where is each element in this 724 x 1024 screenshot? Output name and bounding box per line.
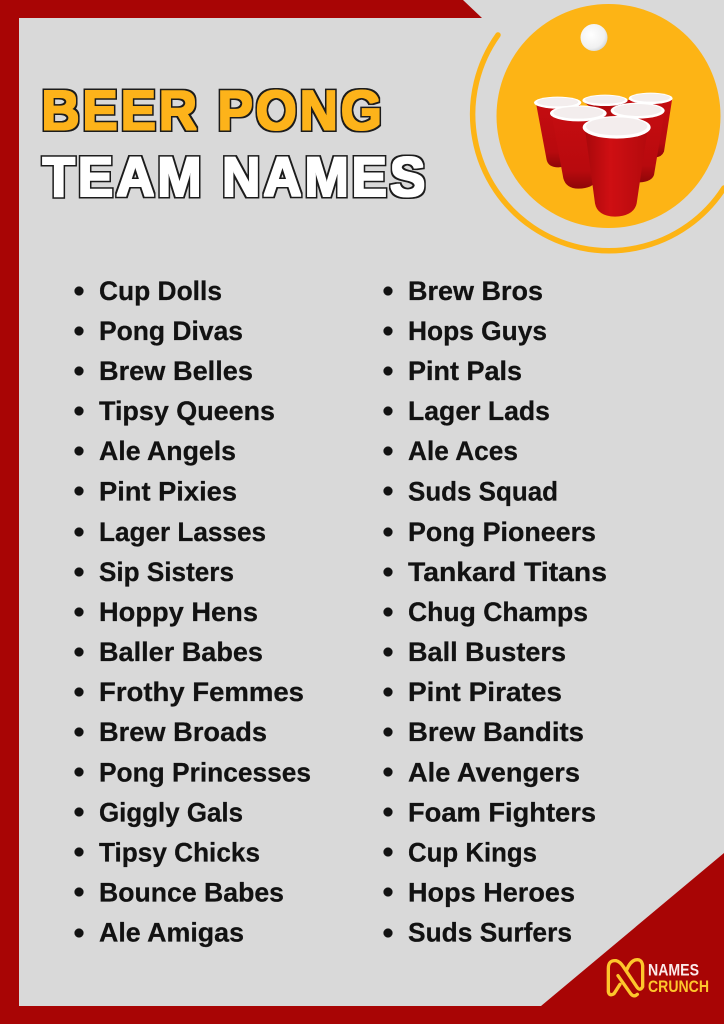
logo: Names Crunch xyxy=(608,960,709,996)
list item: Frothy Femmes: Frothy Femmes xyxy=(99,677,304,707)
list item: Sip Sisters: Sip Sisters xyxy=(99,557,234,587)
list item: Pint Pals: Pint Pals xyxy=(408,356,522,386)
list item: Pong Princesses: Pong Princesses xyxy=(99,758,311,788)
list item: Hoppy Hens: Hoppy Hens xyxy=(99,597,258,627)
list item: Ale Avengers: Ale Avengers xyxy=(408,758,580,788)
list item: Ale Amigas: Ale Amigas xyxy=(99,918,244,948)
title line: Beer Pong: BEER PONG xyxy=(42,79,382,142)
wordmark: Names: NAMES xyxy=(648,962,699,980)
list item: Brew Broads: Brew Broads xyxy=(99,717,267,747)
icon: ping pong ball xyxy=(580,24,608,51)
list item: Ball Busters: Ball Busters xyxy=(408,637,566,667)
yellow ring arc xyxy=(473,35,724,251)
icon: N logo mark xyxy=(608,960,643,996)
list item: Baller Babes: Baller Babes xyxy=(99,637,263,667)
list item: Tipsy Chicks: Tipsy Chicks xyxy=(99,838,260,868)
list item: Brew Bandits: Brew Bandits xyxy=(408,717,584,747)
list item: Hops Guys: Hops Guys xyxy=(408,316,547,346)
list item: Ale Angels: Ale Angels xyxy=(99,436,236,466)
list item: Brew Bros: Brew Bros xyxy=(408,276,543,306)
list item: Bounce Babes: Bounce Babes xyxy=(99,878,284,908)
list item: Suds Surfers: Suds Surfers xyxy=(408,918,572,948)
title line: Team Names: TEAM NAMES xyxy=(42,146,425,208)
list column: right xyxy=(384,276,607,948)
list item: Ale Aces: Ale Aces xyxy=(408,436,518,466)
list column: left xyxy=(74,276,311,948)
list item: Cup Dolls: Cup Dolls xyxy=(99,276,222,306)
list item: Pint Pixies: Pint Pixies xyxy=(99,476,237,506)
list item: Giggly Gals: Giggly Gals xyxy=(99,798,243,828)
wordmark: Crunch: CRUNCH xyxy=(648,978,709,996)
list item: Cup Kings: Cup Kings xyxy=(408,838,537,868)
title xyxy=(42,79,425,208)
illustration: yellow circle with cups and ball xyxy=(473,4,724,251)
list item: Tipsy Queens: Tipsy Queens xyxy=(99,396,275,426)
list item: Pint Pirates: Pint Pirates xyxy=(408,677,562,707)
list item: Pong Divas: Pong Divas xyxy=(99,316,243,346)
icon: red cups xyxy=(534,93,673,217)
list item: Chug Champs: Chug Champs xyxy=(408,597,588,627)
list item: Lager Lasses: Lager Lasses xyxy=(99,517,266,547)
list item: Tankard Titans: Tankard Titans xyxy=(408,557,607,587)
yellow circle xyxy=(496,4,720,228)
list item: Suds Squad: Suds Squad xyxy=(408,476,558,506)
list item: Pong Pioneers: Pong Pioneers xyxy=(408,517,596,547)
list item: Lager Lads: Lager Lads xyxy=(408,396,550,426)
list item: Brew Belles: Brew Belles xyxy=(99,356,253,386)
list item: Foam Fighters: Foam Fighters xyxy=(408,798,596,828)
list item: Hops Heroes: Hops Heroes xyxy=(408,878,575,908)
